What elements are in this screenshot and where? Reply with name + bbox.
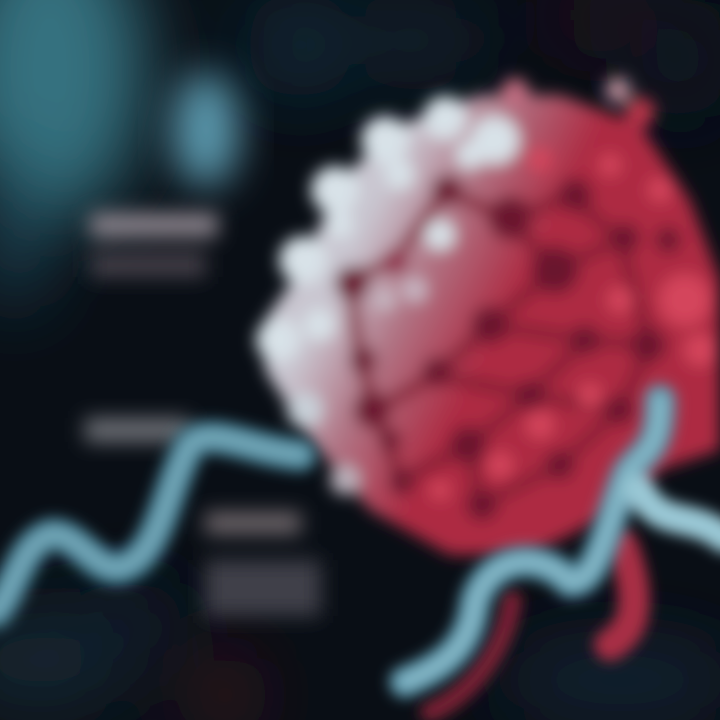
sphere: tip spikes bbox=[501, 77, 655, 127]
text block: blurred heading bars bbox=[90, 213, 218, 277]
ribbon: left blue strand bbox=[0, 437, 300, 612]
sphere: pale scalloped edge bbox=[256, 96, 519, 495]
text block: blurred middle label bbox=[85, 418, 190, 442]
sphere: dark red cells bbox=[335, 175, 681, 521]
ribbon: dark red lower strand bbox=[430, 545, 634, 712]
text block: blurred lower label bbox=[205, 512, 321, 616]
virus sphere bbox=[256, 77, 720, 555]
sphere: bright red highlights bbox=[430, 148, 716, 500]
ribbon: right blue strand bbox=[405, 400, 720, 682]
glow: pale blue blob bbox=[172, 72, 240, 188]
sphere: body bbox=[265, 95, 720, 555]
sphere: dark lattice bbox=[350, 190, 650, 505]
